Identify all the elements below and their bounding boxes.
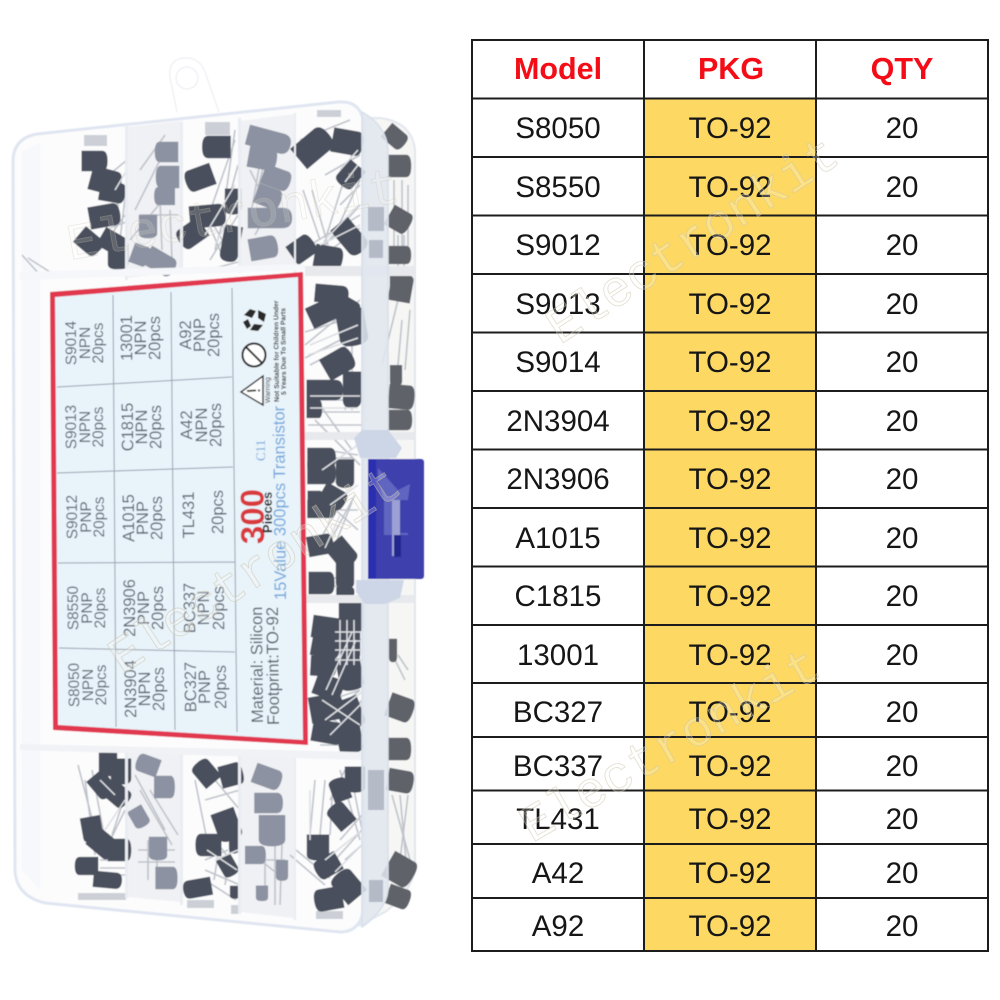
blue title: 15Value 300pcs Transistor: [270, 405, 290, 600]
label column 2: NPN: [132, 321, 150, 356]
label column 1: S9014: [63, 320, 80, 365]
column: model: 2N3906: [506, 463, 610, 496]
column: quantity: [886, 112, 918, 943]
label column 2: 20pcs: [149, 586, 167, 630]
label column 3: NPN: [195, 591, 213, 626]
label column 3: 20pcs: [212, 665, 230, 709]
label column 1: PNP: [79, 592, 96, 624]
column: package: TO-92: [688, 405, 772, 438]
transistors: top row: [73, 124, 371, 913]
label column 1: 20pcs: [90, 406, 107, 448]
column: model: S9012: [515, 229, 601, 262]
blue latch: [368, 459, 424, 579]
column: package: TO-92: [688, 580, 772, 613]
column: quantity: 20: [886, 750, 918, 783]
column: model: S9013: [515, 288, 601, 321]
column: package: TO-92: [688, 112, 772, 145]
label column 1: NPN: [80, 669, 97, 701]
compartment leads: [22, 120, 410, 905]
material text: Material: Silicon: [248, 607, 267, 723]
product label: [50, 272, 308, 745]
column: model: BC337: [513, 750, 603, 783]
label column 3: [177, 313, 230, 712]
label column 2: 20pcs: [147, 405, 165, 449]
label column 2: 20pcs: [146, 316, 164, 360]
shaded compartments: [127, 114, 295, 918]
label column 1: 20pcs: [90, 322, 107, 364]
warning notes: [273, 300, 288, 402]
label column 1: S8550: [65, 586, 82, 630]
transistors: right centre column: [314, 283, 349, 305]
column: quantity: 20: [886, 229, 918, 262]
icon: age restriction: [242, 344, 266, 366]
ghost transistors under hinge strip: [368, 207, 384, 902]
column: model: A42: [532, 857, 584, 890]
column: quantity: 20: [886, 463, 918, 496]
label column 2: 2N3904: [122, 660, 140, 718]
label border: [50, 272, 308, 745]
header row: PKG: [698, 52, 764, 86]
label column 1: NPN: [77, 327, 94, 359]
label column 1: 20pcs: [91, 496, 108, 538]
transistors: bottom row: [99, 753, 117, 776]
column: quantity: 20: [886, 696, 918, 729]
column: package: TO-92: [688, 171, 772, 204]
table grid: [472, 40, 988, 951]
header row: QTY: [871, 52, 933, 86]
label column 2: NPN: [133, 410, 151, 445]
label column 3: 20pcs: [209, 490, 227, 534]
label column 1: S9012: [64, 495, 81, 539]
icon: warning triangle: [241, 376, 263, 405]
label column 3: 20pcs: [210, 586, 228, 630]
label column 3: TL431: [180, 492, 198, 539]
product label: Pieces: [260, 492, 275, 533]
lid hinge strip: [362, 112, 388, 927]
lid shell: [13, 102, 364, 932]
divider strips: [125, 113, 296, 920]
column: package: TO-92: [688, 803, 772, 836]
watermarks: Electronkit: [100, 457, 413, 688]
label column 3: BC327: [182, 662, 200, 712]
column: package: TO-92: [688, 288, 772, 321]
comparison table: [472, 40, 988, 951]
label column 2: 20pcs: [150, 667, 168, 711]
hanging tab: [170, 58, 219, 112]
column: package: TO-92: [688, 463, 772, 496]
label column 1: 20pcs: [92, 587, 109, 629]
column: package: TO-92: [688, 910, 772, 943]
label column 2: PNP: [134, 501, 152, 535]
column: model: A1015: [515, 522, 601, 555]
watermarks: Electronkit: [63, 161, 404, 276]
leads crossing over transistor bodies: [100, 150, 362, 872]
label column 2: [118, 315, 168, 718]
header row: Model: [514, 52, 602, 86]
PKG column fill: [644, 98, 816, 951]
column: model: TL431: [516, 803, 600, 836]
label column 1: NPN: [77, 411, 94, 443]
label column 3: 20pcs: [207, 403, 225, 447]
column: package: TO-92: [688, 696, 772, 729]
label column 1: [63, 320, 110, 707]
header row: [514, 52, 933, 86]
column: package: TO-92: [688, 857, 772, 890]
column: model: S9014: [515, 346, 601, 379]
column: quantity: 20: [886, 405, 918, 438]
transistors in back row: [380, 123, 420, 911]
warning notes: Not Suitable for Children Under: [273, 300, 281, 402]
column: model: C1815: [515, 580, 601, 613]
label column 3: NPN: [193, 408, 211, 443]
label column 1: PNP: [78, 501, 95, 533]
label column 2: PNP: [135, 591, 153, 625]
column: quantity: 20: [886, 171, 918, 204]
column: model: 2N3904: [506, 405, 610, 438]
column: quantity: 20: [886, 639, 918, 672]
column: quantity: 20: [886, 288, 918, 321]
warning notes: 5 Years Due To Small Parts: [280, 308, 288, 395]
column: model: A92: [532, 910, 584, 943]
column: model: S8550: [515, 171, 601, 204]
grey reflections at compartment ends: [78, 110, 343, 919]
column: quantity: 20: [886, 346, 918, 379]
label column 3: 20pcs: [205, 313, 223, 357]
column: package: TO-92: [688, 639, 772, 672]
warning word: Warning: [265, 377, 272, 403]
label column 1: 20pcs: [93, 664, 110, 706]
column: quantity: 20: [886, 803, 918, 836]
column: quantity: 20: [886, 112, 918, 145]
column: quantity: 20: [886, 522, 918, 555]
code C11: C11: [253, 440, 268, 461]
label column 2: 2N3906: [121, 579, 139, 637]
photo: transistor storage box: [13, 58, 424, 932]
column: package: TO-92: [688, 522, 772, 555]
column: model: BC327: [513, 696, 603, 729]
column: package: TO-92: [688, 346, 772, 379]
latch hinges: [354, 430, 402, 458]
label column 2: A1015: [120, 494, 138, 542]
300 pieces badge: 300: [234, 489, 271, 544]
label column 3: BC337: [181, 583, 199, 633]
watermarks: [63, 127, 851, 857]
column: quantity: 20: [886, 580, 918, 613]
column: model: [506, 112, 610, 943]
column: model: S8050: [515, 112, 601, 145]
label column 2: 20pcs: [148, 496, 166, 540]
label column 3: PNP: [191, 318, 209, 352]
label column 3: PNP: [196, 670, 214, 704]
column: package: TO-92: [688, 750, 772, 783]
column: quantity: 20: [886, 910, 918, 943]
shaded transistors behind dividers: [127, 125, 294, 901]
watermarks: Electronkit: [512, 639, 832, 857]
icon: recycle: [243, 309, 266, 331]
watermarks: Electronkit: [538, 127, 851, 358]
label column 2: 13001: [118, 315, 136, 361]
grid lines: [57, 288, 237, 732]
column: package: [688, 112, 772, 943]
label column 2: C1815: [119, 403, 137, 451]
column: quantity: 20: [886, 857, 918, 890]
label column 1: S8050: [66, 663, 83, 707]
label column 2: NPN: [136, 672, 154, 707]
label panel: [55, 277, 303, 740]
column: package: TO-92: [688, 229, 772, 262]
column: model: 13001: [517, 639, 599, 672]
back box shell: [360, 118, 415, 925]
footprint text: Footprint:TO-92: [263, 607, 283, 725]
label column 3: A42: [178, 410, 196, 440]
label column 3: A92: [177, 320, 195, 350]
label column 1: S9013: [63, 405, 80, 449]
